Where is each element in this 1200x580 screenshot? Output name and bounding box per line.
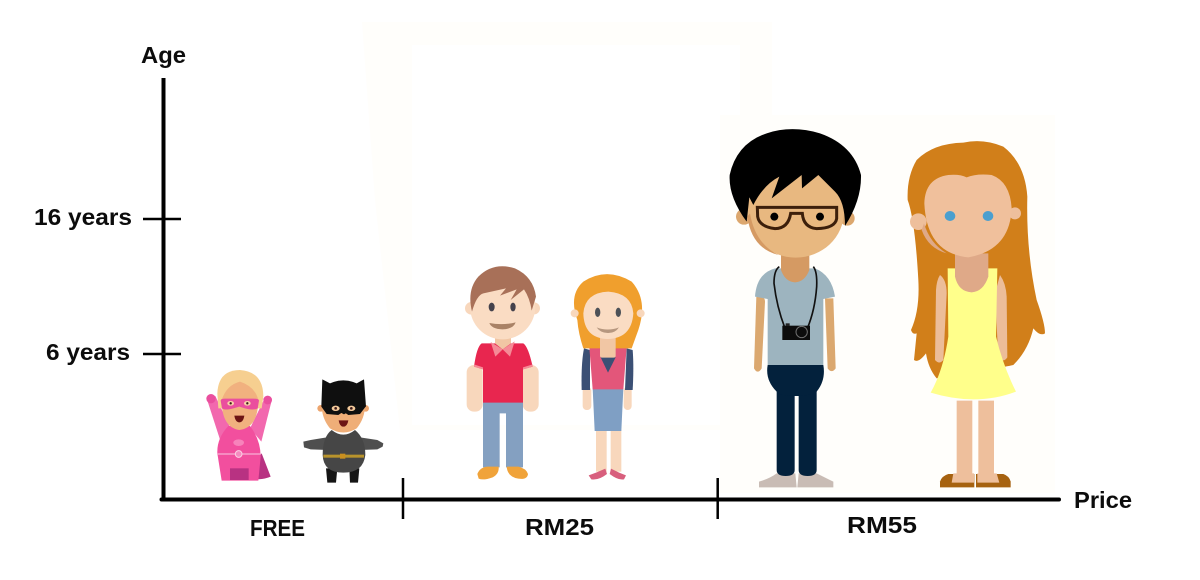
axes with ticks — [143, 78, 1059, 519]
x axis label: Price: Price — [1074, 487, 1132, 513]
price label: FREE: FREE — [250, 515, 305, 541]
icon: pink superhero girl — [206, 370, 272, 481]
y axis tick label: 16 years: 16 years — [34, 204, 132, 230]
price label: RM25: RM25 — [525, 514, 594, 540]
price label: RM55: RM55 — [847, 512, 917, 538]
icon: boy in red polo — [465, 266, 540, 479]
y axis tick label: 6 years: 6 years — [46, 339, 130, 365]
y axis label: Age: Age — [141, 42, 186, 68]
icon: girl in pink vest and blue skirt — [571, 274, 645, 480]
icon: black masked cat kid — [303, 379, 383, 483]
icon: teen girl with long orange hair and yellow dress — [908, 141, 1045, 487]
icon: teen boy with glasses and camera — [730, 129, 861, 487]
